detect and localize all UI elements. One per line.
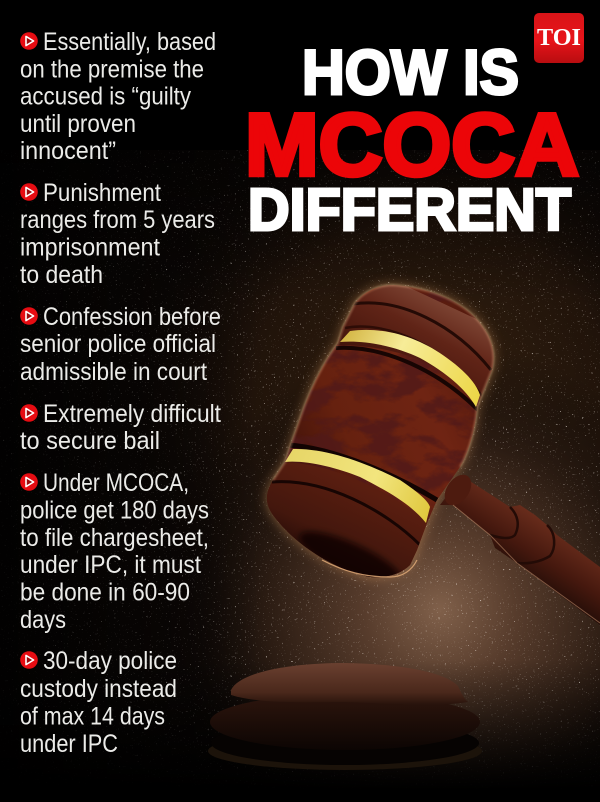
icon: play bullet <box>20 183 38 201</box>
bullet 3 <box>20 303 221 386</box>
bullet 6 <box>20 647 177 758</box>
bullet 2: Punishment <box>43 179 161 207</box>
title <box>245 38 579 243</box>
bullet 5: Under MCOCA, <box>43 469 189 497</box>
bullet 5: days <box>20 606 66 634</box>
bullet 5: to file chargesheet, <box>20 524 209 552</box>
bullet list <box>20 28 221 758</box>
bullet 2: to death <box>20 261 103 289</box>
bullet 6: custody instead <box>20 675 177 703</box>
upper cap <box>336 285 494 405</box>
bullet 6: of max 14 days <box>20 702 165 730</box>
bullet 3: senior police official <box>20 330 216 358</box>
gavel handle <box>439 470 600 625</box>
bullet 2 <box>20 179 215 289</box>
bullet 2: imprisonment <box>20 234 160 262</box>
head underside shadow <box>298 529 400 578</box>
background <box>0 150 600 784</box>
bullet 1 <box>20 28 216 165</box>
gavel sound block <box>208 663 482 770</box>
bullet 5: under IPC, it must <box>20 551 201 579</box>
icon: play bullet <box>20 32 38 50</box>
bullet 4: Extremely difficult <box>43 400 221 428</box>
icon: play bullet <box>20 404 38 422</box>
gavel <box>250 275 600 625</box>
rim light on head bottom <box>322 560 417 577</box>
bullet 4: to secure bail <box>20 427 160 455</box>
gavel head <box>267 285 494 578</box>
bullet 1: until proven <box>20 110 136 138</box>
bullet 5 <box>20 469 209 634</box>
bullet 4 <box>20 400 221 455</box>
bullet 3: admissible in court <box>20 358 207 386</box>
bullet 1: on the premise the <box>20 56 204 84</box>
icon: play bullet <box>20 473 38 491</box>
title line: MCOCA: MCOCA <box>245 95 579 194</box>
bullet 2: ranges from 5 years <box>20 206 215 234</box>
bullet 1: innocent” <box>20 137 116 165</box>
title line: HOW IS: HOW IS <box>302 38 519 108</box>
upper gold band <box>340 330 480 407</box>
bullet 6: under IPC <box>20 730 118 758</box>
bullet 1: accused is “guilty <box>20 82 191 110</box>
bullet 3: Confession before <box>43 303 221 331</box>
icon: play bullet <box>20 651 38 669</box>
bullet 1: Essentially, based <box>43 28 216 56</box>
glow around gavel head <box>267 285 494 577</box>
bullet 5: police get 180 days <box>20 496 209 524</box>
lower cap <box>269 462 427 578</box>
TOI logo: TOI <box>537 25 581 51</box>
lower gold band <box>285 449 430 523</box>
bullet 6: 30-day police <box>43 647 177 675</box>
icon: play bullet <box>20 307 38 325</box>
title line: DIFFERENT: DIFFERENT <box>248 177 571 243</box>
bullet 5: be done in 60-90 <box>20 578 190 606</box>
rim light on head <box>273 285 494 480</box>
TOI logo <box>534 13 584 63</box>
